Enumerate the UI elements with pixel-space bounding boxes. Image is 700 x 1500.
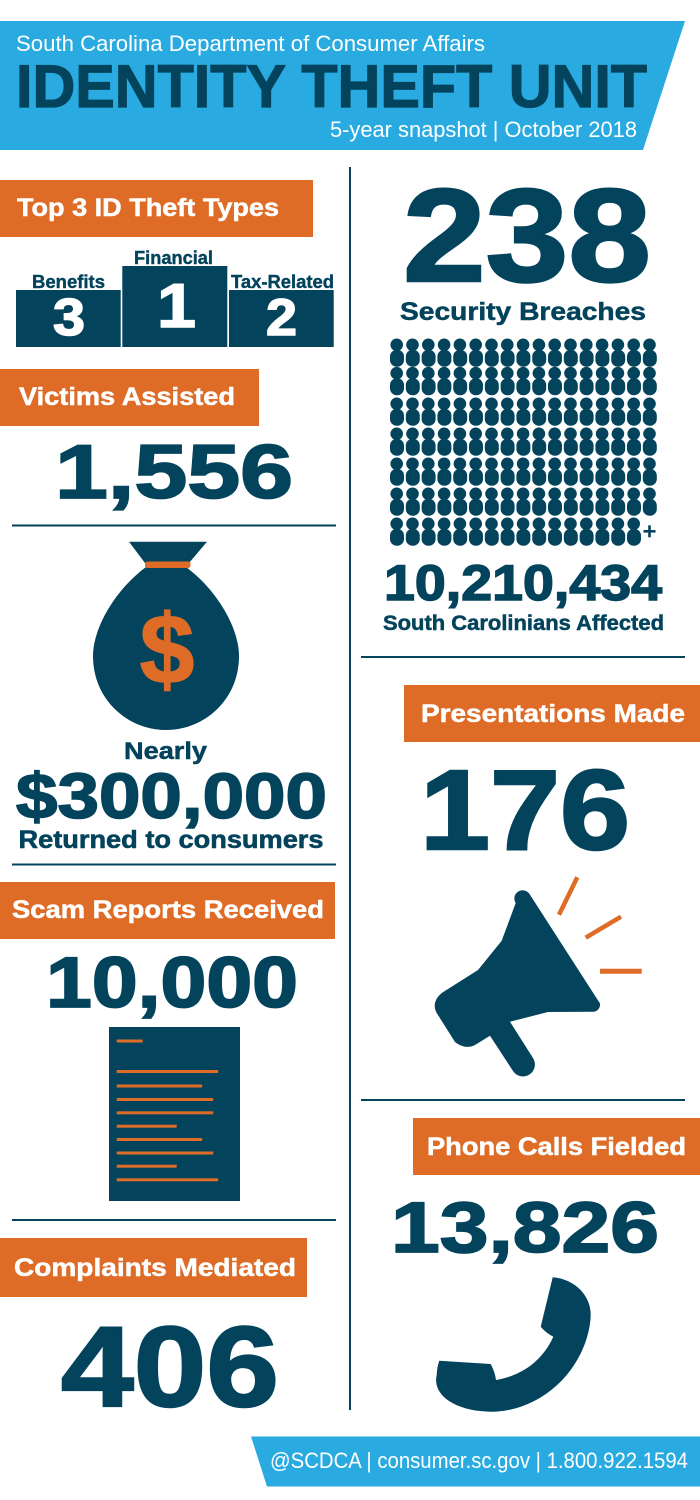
heading: complaints mediated — [0, 1238, 307, 1297]
heading: complaints mediated: Complaints Mediated — [14, 1254, 296, 1282]
heading: top 3 id theft types — [0, 180, 313, 237]
icon: megaphone — [435, 877, 642, 1076]
header banner — [0, 21, 685, 150]
icon: document — [109, 1027, 240, 1201]
heading: scam reports received: Scam Reports Received — [12, 896, 324, 924]
heading: presentations made — [404, 685, 700, 742]
podium chart — [16, 248, 334, 347]
chart: grid of people — [390, 338, 657, 546]
heading: victims assisted: Victims Assisted — [19, 383, 235, 411]
number: security breaches: 238 — [403, 162, 651, 309]
text: nearly: Nearly — [124, 738, 208, 765]
text: security breaches: Security Breaches — [400, 298, 646, 326]
podium chart: Tax-Related — [231, 272, 334, 292]
number: south carolinians affected: 10,210,434 — [384, 555, 662, 611]
heading: scam reports received — [0, 882, 335, 939]
footer banner — [251, 1436, 700, 1486]
icon: money bag — [93, 542, 239, 730]
number: complaints mediated: 406 — [61, 1304, 279, 1431]
text: returned to consumers: Returned to consumers — [18, 826, 324, 854]
icon: money bag: $ — [140, 594, 194, 704]
number: presentations made: 176 — [420, 747, 630, 873]
organization name: South Carolina Department of Consumer Affairs — [16, 31, 485, 56]
number: phone calls fielded: 13,826 — [391, 1189, 659, 1268]
podium chart: Benefits — [32, 272, 105, 292]
heading: victims assisted — [0, 369, 259, 426]
title: IDENTITY THEFT UNIT — [16, 53, 647, 120]
text: south carolinians affected: South Carolinians Affected — [383, 612, 664, 635]
date subtitle: 5-year snapshot | October 2018 — [330, 117, 637, 142]
heading: phone calls fielded — [413, 1118, 700, 1175]
podium chart: 2 — [266, 289, 297, 347]
number: victims assisted: 1,556 — [55, 430, 293, 515]
number: scam reports: 10,000 — [46, 944, 298, 1023]
icon: telephone handset — [436, 1277, 591, 1412]
number: dollars returned: $300,000 — [16, 760, 327, 832]
heading: presentations made: Presentations Made — [421, 700, 685, 728]
podium chart: 3 — [53, 289, 85, 347]
heading: phone calls fielded: Phone Calls Fielded — [427, 1133, 686, 1161]
heading: top 3 id theft types: Top 3 ID Theft Types — [17, 194, 279, 222]
podium chart: Financial — [134, 248, 213, 268]
podium chart: 1 — [157, 272, 196, 341]
